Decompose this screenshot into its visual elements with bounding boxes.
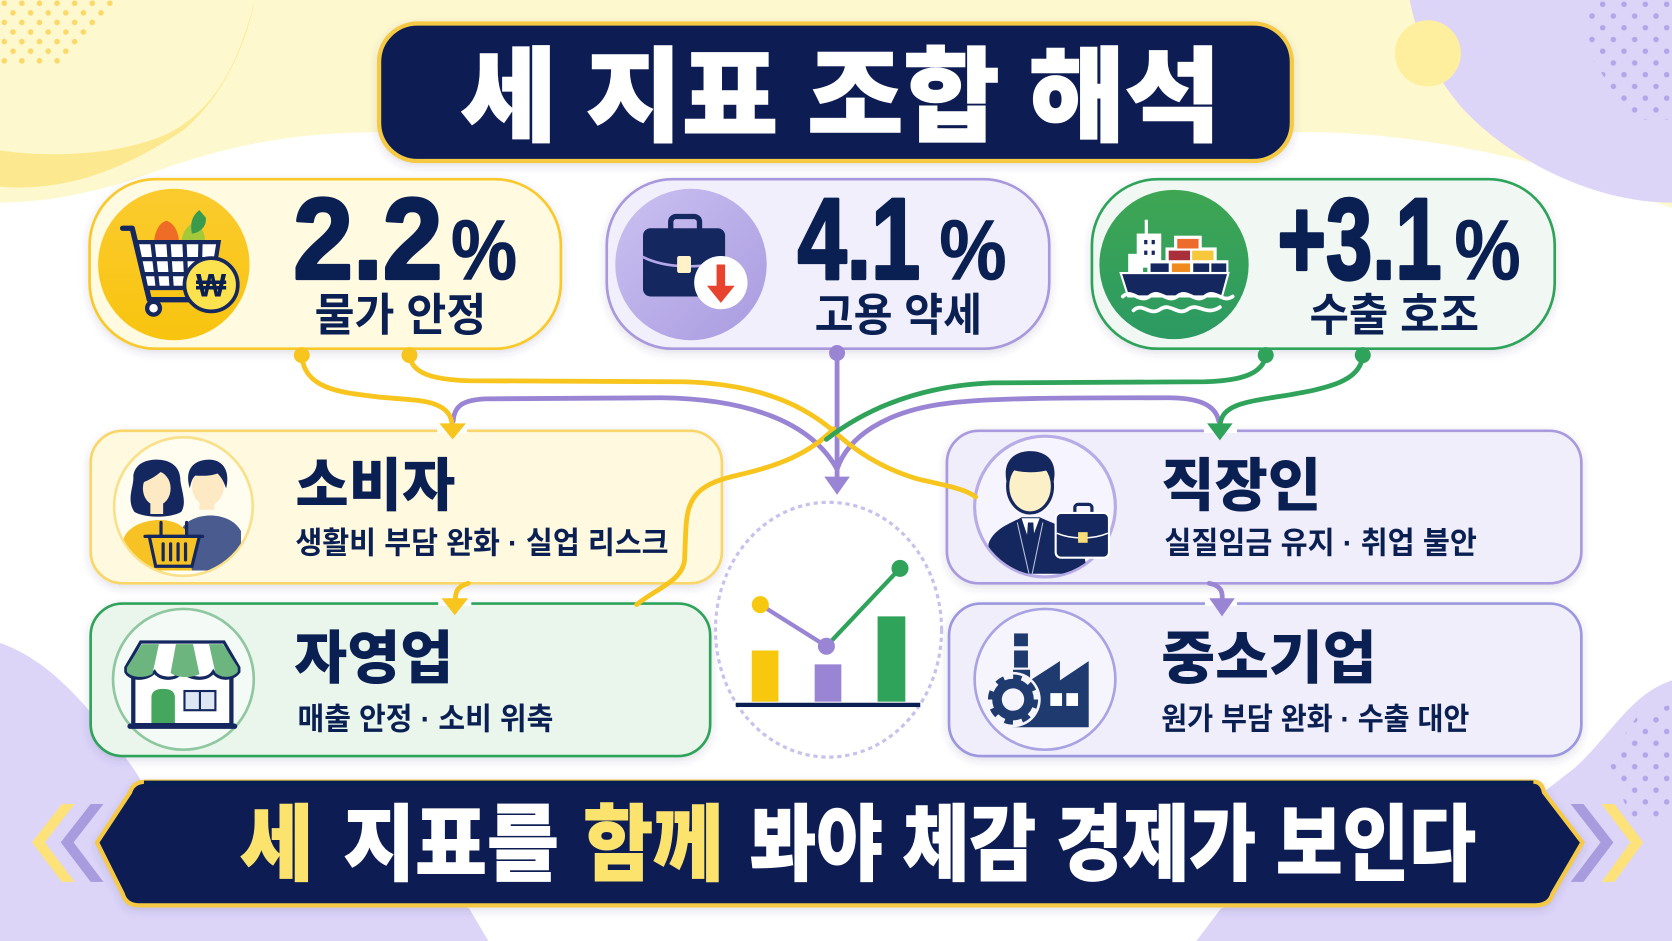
bottom banner	[97, 781, 1582, 905]
bars	[752, 616, 905, 702]
arrow: employment to workers	[837, 398, 1219, 469]
chart: central bar and line icon	[716, 502, 942, 757]
icon: factory with gear	[975, 609, 1115, 750]
panel: office workers	[947, 431, 1581, 583]
icon: shopping cart with won coin: ₩	[196, 267, 227, 303]
heading: 자영업	[294, 627, 453, 691]
title text: 세 지표 조합 해석	[461, 39, 1221, 154]
label: 고용 약세	[815, 291, 982, 341]
icon: couple with basket	[114, 437, 253, 576]
arrow: price to consumers	[302, 355, 452, 427]
description: 실질임금 유지 · 취업 불안	[1164, 525, 1477, 560]
icon: storefront	[113, 609, 254, 750]
value: 2.2	[293, 175, 443, 303]
arrow: workers to small businesses	[1209, 583, 1222, 600]
arrow: price to workers	[409, 355, 976, 497]
banner text: 봐야 체감 경제가 보인다	[750, 798, 1476, 891]
arrow: exports to workers	[1220, 355, 1363, 427]
background: pale yellow top wave	[0, 0, 1672, 208]
trend line	[752, 560, 909, 655]
percent sign: %	[939, 203, 1007, 298]
description: 매출 안정 · 소비 위축	[298, 701, 553, 736]
icon: office worker with briefcase	[975, 436, 1115, 577]
banner text: 지표를	[343, 798, 559, 891]
description: 생활비 부담 완화 · 실업 리스크	[295, 525, 669, 560]
panel: stat 2.2% price stability	[90, 175, 561, 349]
arrow: exports to center	[826, 355, 1266, 439]
label: 물가 안정	[315, 291, 486, 341]
banner text: 세	[240, 798, 314, 891]
arrow: consumers to self-employed	[455, 583, 468, 600]
connector gaps	[437, 431, 1237, 604]
percent sign: %	[1454, 203, 1521, 298]
dashed circle	[716, 502, 942, 757]
background: bottom left purple blob	[0, 643, 488, 941]
title banner	[379, 23, 1292, 161]
icon: briefcase with down arrow	[615, 189, 767, 340]
arrow: exports via center to self-employed	[637, 429, 834, 605]
banner text: 함께	[583, 798, 723, 891]
axis	[736, 703, 920, 707]
arrow: employment to center	[835, 353, 839, 480]
background: top right dot pattern	[1585, 0, 1672, 119]
panel: self-employed	[91, 604, 710, 756]
value: 4.1	[798, 175, 920, 303]
percent sign: %	[451, 203, 517, 298]
heading: 중소기업	[1161, 627, 1377, 691]
connector start dots	[294, 345, 1371, 363]
icon: container ship	[1099, 190, 1249, 339]
background: yellow crescent	[0, 0, 255, 187]
panel: consumers	[91, 431, 722, 583]
heading: 직장인	[1161, 454, 1321, 518]
icon: shopping cart with won coin	[98, 189, 250, 340]
background: bottom right purple blob	[1196, 680, 1672, 941]
panel: small and medium businesses	[949, 604, 1581, 756]
background: top right purple blob	[1410, 0, 1672, 203]
background: yellow circle	[1395, 20, 1461, 86]
heading: 소비자	[295, 454, 455, 518]
connectors between indicators and groups	[294, 345, 1371, 616]
arrow: employment to consumers	[453, 398, 837, 469]
value: +3.1	[1277, 175, 1442, 303]
left chevrons	[32, 804, 103, 882]
right chevrons	[1571, 804, 1643, 882]
background: top left dot pattern	[0, 0, 124, 64]
background: bottom right dot pattern	[1608, 704, 1672, 821]
label: 수출 호조	[1309, 291, 1479, 341]
banner text	[240, 798, 1476, 891]
arrowheads	[439, 423, 1235, 616]
panel: stat 4.1% weak employment	[607, 175, 1049, 349]
description: 원가 부담 완화 · 수출 대안	[1161, 701, 1469, 736]
panel: stat +3.1% exports	[1092, 175, 1555, 349]
